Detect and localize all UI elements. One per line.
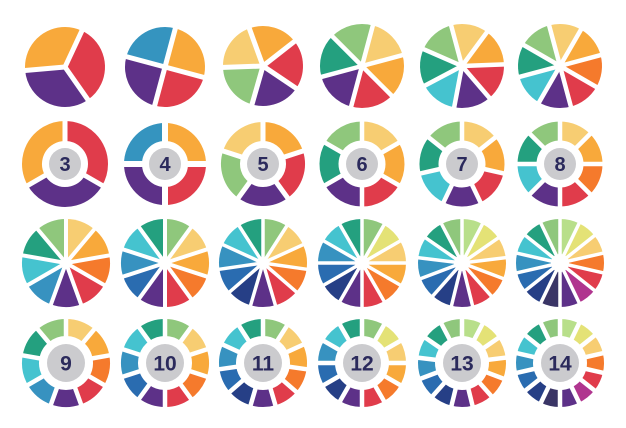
pie chart: 8 segments [516,22,604,110]
donut chart: 6: 6 [356,154,368,176]
donut chart: 4: 4 [159,154,171,176]
donut chart: 6 [317,118,407,210]
donut chart: 5 [218,118,308,209]
pie chart: 10 segments [119,215,211,311]
pie chart: 9 segments [19,215,113,308]
donut chart: 9 [16,313,116,413]
donut chart: 11: 11 [252,352,274,376]
pie chart: 3 segments [19,25,93,105]
donut chart: 8 [513,117,607,211]
donut chart: 11 [213,313,313,413]
donut chart: 7 [416,118,508,210]
pie chart: 5 segments [217,23,301,110]
pie chart: 13 segments [414,215,510,310]
donut chart: 14: 14 [548,352,572,376]
donut chart: 8: 8 [554,154,566,176]
donut chart: 13: 13 [450,352,474,376]
pie chart: 4 segments [121,23,209,111]
pie chart: 12 segments [314,215,410,311]
donut chart: 14 [510,313,610,413]
donut chart: 12: 12 [350,352,374,376]
donut chart: 10 [115,313,215,413]
donut chart: 4 [119,118,211,210]
pie chart: 11 segments [215,215,311,309]
donut chart: 12 [314,315,410,411]
donut chart: 5: 5 [257,154,269,176]
donut chart: 3 [20,118,110,209]
donut chart: 3: 3 [59,154,71,176]
donut chart: 9: 9 [60,352,72,376]
pie chart: 7 segments [420,22,508,111]
donut chart: 10: 10 [153,352,177,376]
donut chart: 13 [412,313,512,413]
pie chart: 14 segments [513,215,607,311]
pie chart: 6 segments [318,22,406,110]
donut chart: 7: 7 [456,154,468,176]
